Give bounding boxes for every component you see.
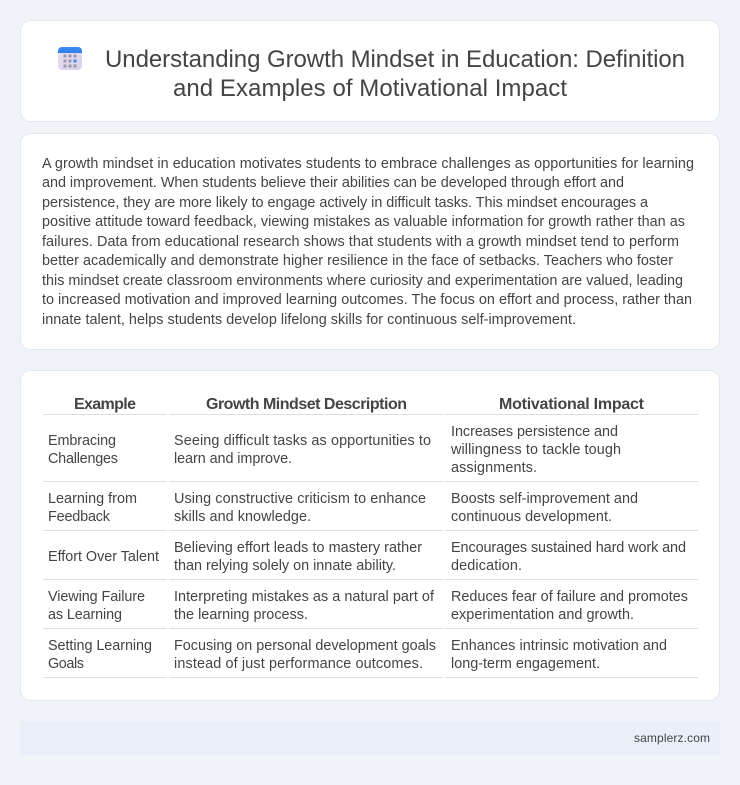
table row: Learning from Feedback: Feedback	[48, 509, 111, 525]
table row: Setting Learning Goals	[43, 638, 698, 678]
table row: Embracing Challenges: Embracing	[48, 433, 116, 449]
table row: Effort Over Talent: Encourages sustained hard work and	[451, 540, 686, 556]
table row: Embracing Challenges: Challenges	[48, 451, 118, 467]
table row: Effort Over Talent: than relying solely on innate ability.	[174, 558, 396, 574]
table row: Viewing Failure as Learning: experimentation and growth.	[451, 607, 634, 623]
table row: Learning from Feedback: Using constructive criticism to enhance	[174, 491, 426, 507]
text block: paragraph: innate talent, helps students develop lifelong skills for continuous self-improvement.	[42, 312, 576, 328]
title: and Examples of Motivational Impact	[173, 75, 567, 102]
table row: Embracing Challenges: assignments.	[451, 460, 537, 476]
footer bar	[20, 721, 720, 755]
table row: Viewing Failure as Learning: Viewing Failure	[48, 589, 145, 605]
table row: Viewing Failure as Learning: as Learning	[48, 607, 122, 623]
table row: Effort Over Talent	[43, 540, 698, 580]
title: Understanding Growth Mindset in Education: Definition	[105, 46, 685, 73]
table row: Embracing Challenges: learn and improve.	[174, 451, 292, 467]
text block: paragraph: failures. Data from educational research shows that students with a growth mindset tend to perform	[42, 234, 679, 250]
table row: Learning from Feedback: continuous development.	[451, 509, 612, 525]
text block: paragraph: better academically and demonstrate higher resilience in the face of setbacks. Teachers who foster	[42, 253, 673, 269]
text block: paragraph: positive attitude toward feedback, viewing mistakes as valuable information for growth rather than as	[42, 214, 685, 230]
table: header row	[43, 396, 698, 415]
table row: Effort Over Talent: Effort Over Talent	[48, 549, 159, 565]
table row: Viewing Failure as Learning: Reduces fear of failure and promotes	[451, 589, 688, 605]
table: header row: Example	[74, 396, 136, 413]
table row: Embracing Challenges	[43, 424, 698, 482]
table row: Setting Learning Goals: instead of just performance outcomes.	[174, 656, 423, 672]
table row: Learning from Feedback: Learning from	[48, 491, 137, 507]
table: header row: Motivational Impact	[499, 396, 645, 413]
table row: Embracing Challenges: Increases persistence and	[451, 424, 618, 440]
table row: Setting Learning Goals: Enhances intrinsic motivation and	[451, 638, 667, 654]
footer text: samplerz.com: samplerz.com	[634, 731, 710, 745]
text block: paragraph: and improvement. When students believe their abilities can be developed through effort and	[42, 175, 624, 191]
title	[105, 46, 685, 102]
text block: paragraph: to increased motivation and improved learning outcomes. The focus on effort and process, rather than	[42, 292, 692, 308]
table: header row: Growth Mindset Description	[206, 396, 407, 413]
table row: Learning from Feedback: Boosts self-improvement and	[451, 491, 638, 507]
icon: calendar grid	[58, 47, 82, 70]
table row: Setting Learning Goals: Focusing on personal development goals	[174, 638, 436, 654]
table row: Embracing Challenges: willingness to tackle tough	[450, 442, 621, 458]
text block: paragraph	[42, 156, 694, 328]
table row: Effort Over Talent: dedication.	[451, 558, 522, 574]
text block: paragraph: this mindset create classroom environments where curiosity and experimentation are valued, leading	[42, 273, 683, 289]
panel: intro paragraph	[20, 134, 720, 350]
table row: Embracing Challenges: Seeing difficult tasks as opportunities to	[174, 433, 431, 449]
panel: table card	[20, 370, 720, 700]
table row: Learning from Feedback: skills and knowledge.	[174, 509, 311, 525]
table row: Viewing Failure as Learning: the learning process.	[174, 607, 308, 623]
table row: Setting Learning Goals: Setting Learning	[48, 638, 152, 654]
table row: Setting Learning Goals: Goals	[48, 656, 84, 672]
table row: Viewing Failure as Learning	[43, 589, 698, 629]
table row: Learning from Feedback	[43, 491, 698, 531]
table row: Setting Learning Goals: long-term engagement.	[451, 656, 600, 672]
table row: Effort Over Talent: Believing effort leads to mastery rather	[174, 540, 422, 556]
text block: paragraph: persistence, they are more likely to engage actively in difficult tasks. This mindset encourages a	[42, 195, 648, 211]
table row: Viewing Failure as Learning: Interpreting mistakes as a natural part of	[174, 589, 435, 605]
text block: paragraph: A growth mindset in education motivates students to embrace challenges as opportunities for learning	[42, 156, 694, 172]
panel: title card	[20, 20, 720, 122]
